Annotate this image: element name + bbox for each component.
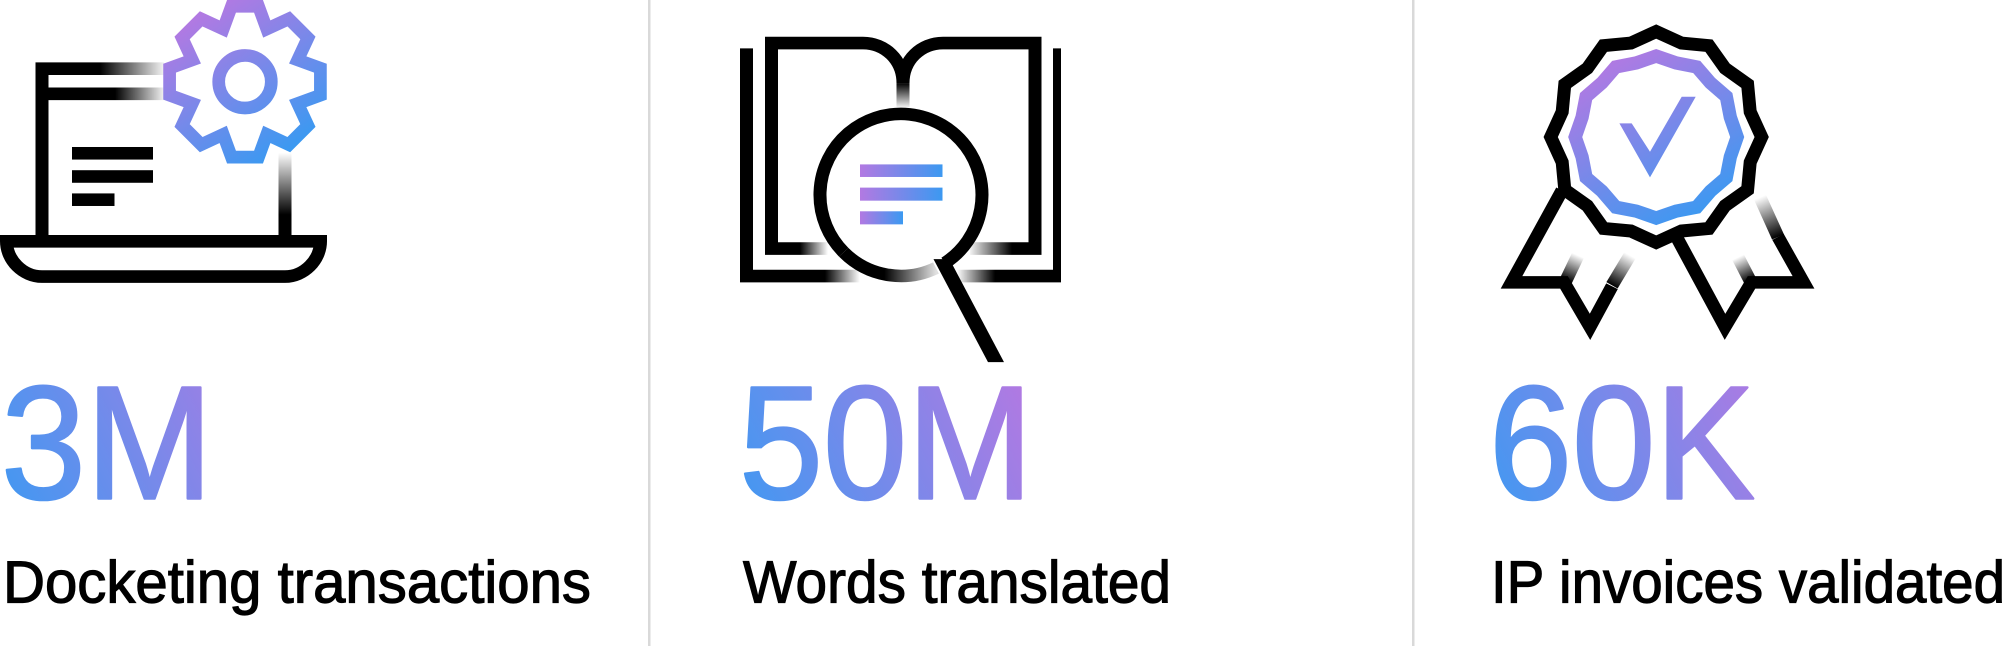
panel: words translated <box>739 43 1171 615</box>
icon: laptop with gear <box>6 6 320 277</box>
laptop body and base <box>6 69 320 277</box>
book pages <box>746 43 1061 276</box>
label: words translated: Words translated <box>743 549 1171 615</box>
stat: 3M: 3M <box>1 352 213 533</box>
rosette <box>1551 32 1762 243</box>
panel: IP invoices validated <box>1489 32 2004 615</box>
label: docketing transactions: Docketing transactions <box>3 549 591 615</box>
ribbons <box>1512 191 1804 327</box>
icon: check mark <box>1619 97 1696 177</box>
magnifier text lines <box>860 164 942 224</box>
magnifier <box>820 114 1004 362</box>
icon: gear <box>170 6 320 157</box>
screen text lines <box>72 147 153 206</box>
rosette outer black edge <box>1551 32 1762 243</box>
stat: 50M: 50M <box>739 352 1033 533</box>
stat: 60K: 60K <box>1489 352 1755 533</box>
icon: award rosette <box>1512 32 1804 327</box>
rosette inner gradient ring <box>1575 56 1737 218</box>
icon: book with magnifier <box>746 43 1061 362</box>
panel: docketing transactions <box>1 6 591 615</box>
